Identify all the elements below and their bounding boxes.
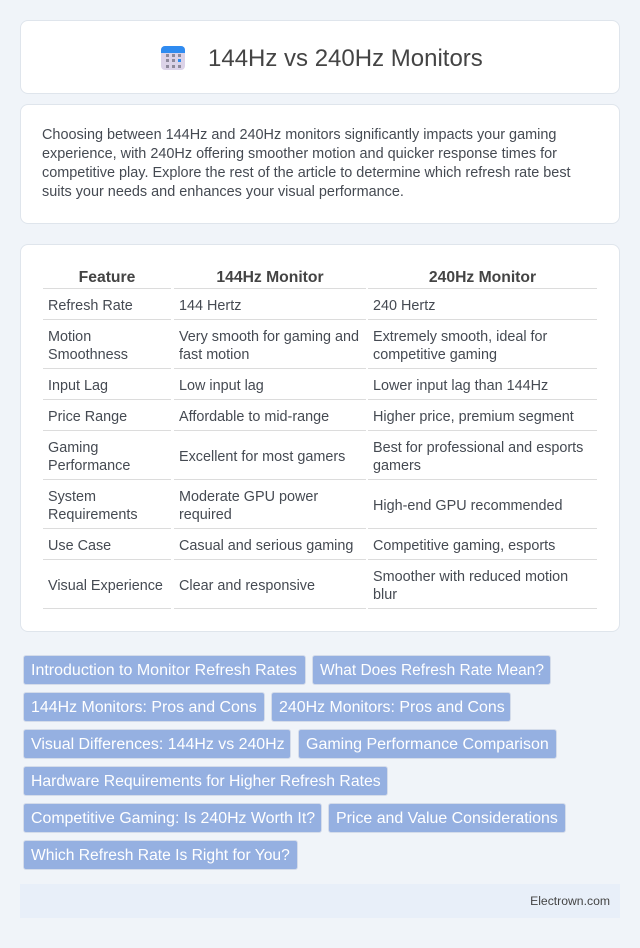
row: use case: Use Case	[48, 538, 111, 554]
row: price range	[48, 409, 574, 425]
row: gaming performance	[48, 440, 583, 474]
row: input lag	[48, 378, 548, 394]
tag	[23, 840, 298, 870]
row: gaming performance: Best for professional and esports	[373, 440, 583, 456]
row: system requirements: High-end GPU recommended	[373, 498, 563, 514]
tag	[312, 655, 551, 685]
row: visual experience: Smoother with reduced motion	[373, 569, 568, 585]
row: motion smoothness: competitive gaming	[373, 347, 497, 363]
footer	[20, 884, 620, 918]
row: input lag: Input Lag	[48, 378, 108, 394]
tag: What Does Refresh Rate Mean?	[320, 662, 544, 679]
row: visual experience: Visual Experience	[48, 578, 163, 594]
panel: comparison table	[20, 244, 620, 632]
tag: Hardware Requirements for Higher Refresh Rates	[31, 773, 381, 790]
tag: 240Hz Monitors: Pros and Cons	[279, 699, 505, 716]
row: gaming performance: Gaming	[48, 440, 98, 456]
row: motion smoothness	[48, 329, 548, 363]
row: refresh rate: 144 Hertz	[179, 298, 241, 314]
intro text: competitive play. Explore the rest of the article to determine which refresh rate best	[42, 165, 571, 181]
tag	[271, 692, 511, 722]
row: motion smoothness: Very smooth for gaming and	[179, 329, 359, 345]
row: gaming performance: Performance	[48, 458, 130, 474]
row: visual experience: Clear and responsive	[179, 578, 315, 594]
row: motion smoothness: Extremely smooth, ideal for	[373, 329, 547, 345]
tag	[23, 803, 322, 833]
intro text	[42, 127, 571, 200]
tag: 144Hz Monitors: Pros and Cons	[31, 699, 257, 716]
table header: Feature	[79, 269, 135, 286]
row: refresh rate: 240 Hertz	[373, 298, 435, 314]
tag	[23, 692, 265, 722]
intro text: suits your needs and enhances your visual performance.	[42, 184, 404, 200]
row: system requirements: Requirements	[48, 507, 138, 523]
row: system requirements: System	[48, 489, 96, 505]
intro text: Choosing between 144Hz and 240Hz monitors significantly impacts your gaming	[42, 127, 556, 143]
tag: Price and Value Considerations	[336, 810, 558, 827]
table header: 240Hz Monitor	[429, 269, 536, 286]
row: price range: Affordable to mid-range	[179, 409, 329, 425]
row: motion smoothness: Smoothness	[48, 347, 128, 363]
tag	[328, 803, 566, 833]
tag	[23, 766, 388, 796]
tag list	[23, 655, 566, 870]
tag	[23, 729, 291, 759]
tag: Which Refresh Rate Is Right for You?	[31, 847, 290, 864]
row: input lag: Lower input lag than 144Hz	[373, 378, 548, 394]
row: use case: Casual and serious gaming	[179, 538, 353, 554]
tag	[298, 729, 557, 759]
row: price range: Higher price, premium segment	[373, 409, 574, 425]
row: gaming performance: Excellent for most gamers	[179, 449, 345, 465]
row: system requirements	[48, 489, 563, 523]
row: refresh rate	[48, 298, 435, 314]
tag: Competitive Gaming: Is 240Hz Worth It?	[31, 810, 315, 827]
table header: 144Hz Monitor	[216, 269, 324, 286]
panel: title	[20, 20, 620, 94]
tag: Introduction to Monitor Refresh Rates	[31, 662, 297, 679]
icon: calendar	[161, 46, 185, 70]
footer text: Electrown.com	[530, 894, 610, 908]
row: refresh rate: Refresh Rate	[48, 298, 133, 314]
tag	[23, 655, 306, 685]
row: system requirements: Moderate GPU power	[179, 489, 318, 505]
tag: Gaming Performance Comparison	[306, 736, 549, 753]
row: price range: Price Range	[48, 409, 127, 425]
row: motion smoothness: fast motion	[179, 347, 249, 363]
title text: 144Hz vs 240Hz Monitors	[208, 45, 483, 72]
row: system requirements: required	[179, 507, 232, 523]
panel: introduction	[20, 104, 620, 224]
row: input lag: Low input lag	[179, 378, 264, 394]
row: use case	[48, 538, 555, 554]
row: visual experience: blur	[373, 587, 397, 603]
row: motion smoothness: Motion	[48, 329, 91, 345]
row: use case: Competitive gaming, esports	[373, 538, 555, 554]
intro text: experience, with 240Hz offering smoother motion and quicker response times for	[42, 146, 557, 162]
tag: Visual Differences: 144Hz vs 240Hz	[31, 736, 285, 753]
row: visual experience	[48, 569, 568, 603]
table header	[79, 269, 536, 286]
row: gaming performance: gamers	[373, 458, 421, 474]
